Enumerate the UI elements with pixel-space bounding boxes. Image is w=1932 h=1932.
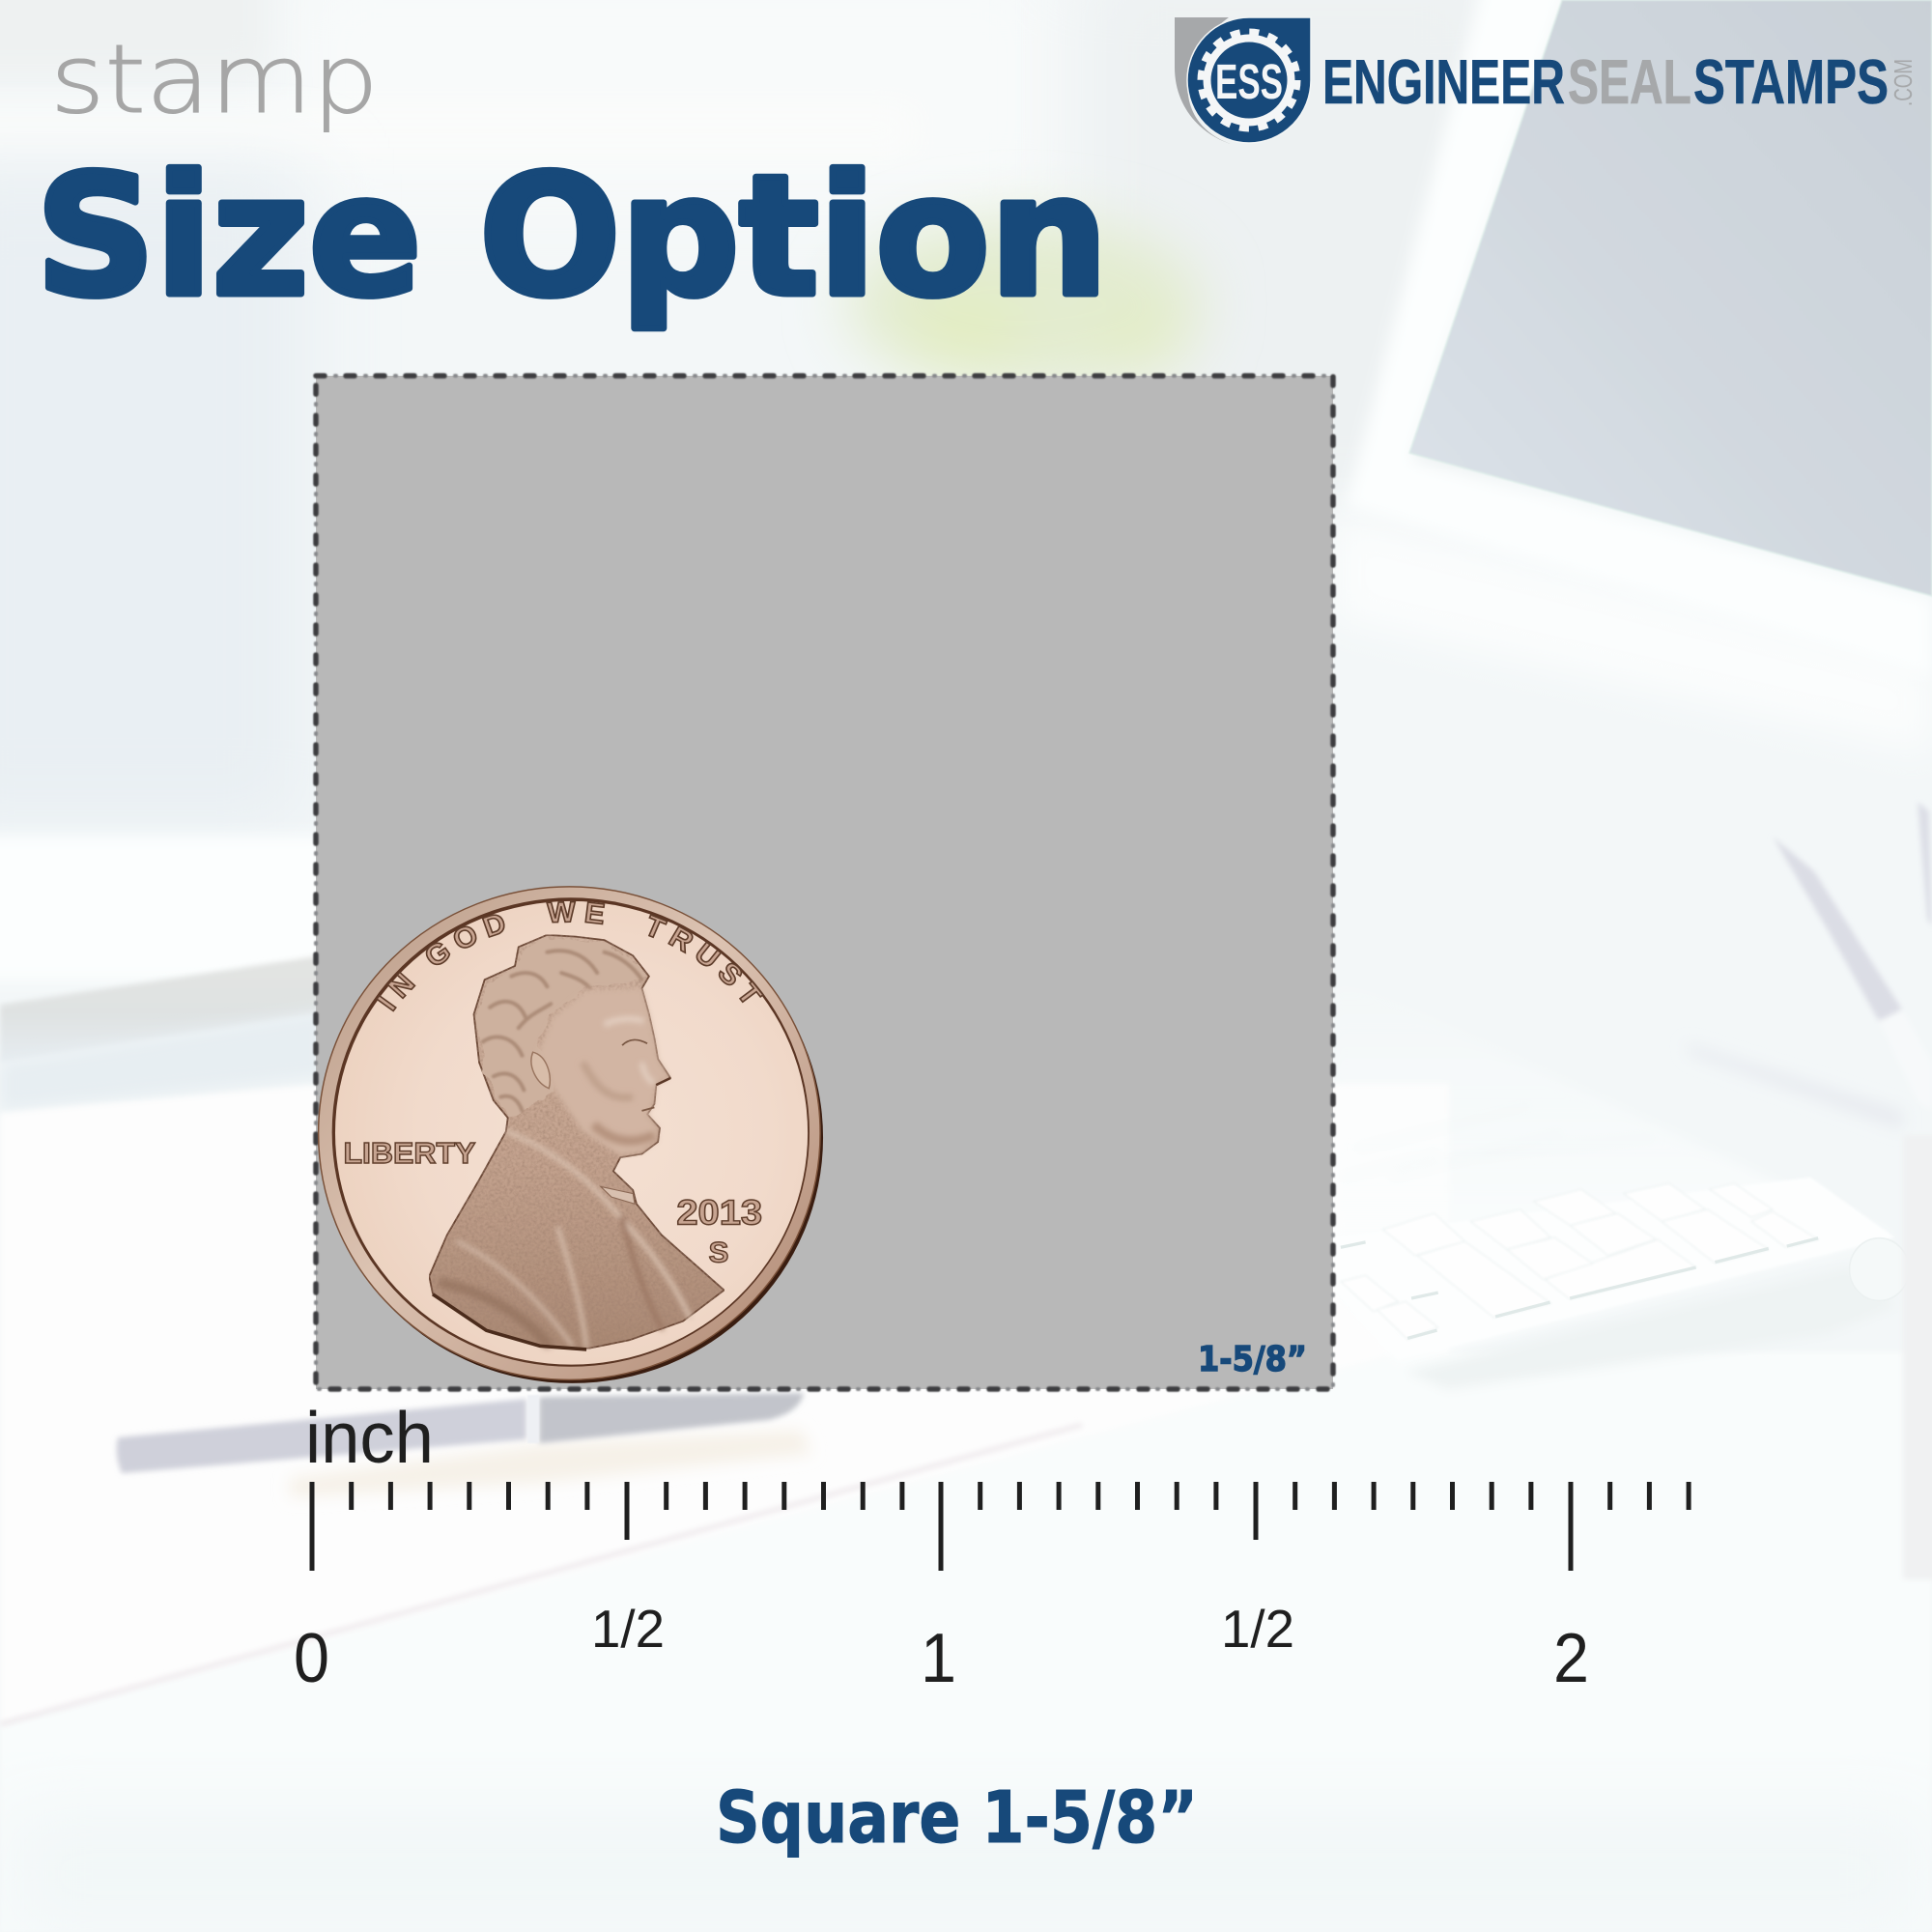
hair — [477, 938, 645, 1116]
Lincoln portrait — [429, 935, 724, 1350]
ruler — [294, 1397, 1689, 1697]
ruler ticks — [312, 1482, 1689, 1571]
face — [538, 988, 669, 1155]
coin motto: IN GOD WE TRUST — [377, 900, 763, 1012]
ruler numbers: 1 — [921, 1620, 956, 1697]
caption: Square 1-5/8: Square 1-5/8” — [716, 1776, 1198, 1860]
ruler numbers: 0 — [294, 1620, 329, 1697]
logo badge: ESS — [1215, 54, 1283, 109]
computer monitor — [1409, 0, 1932, 596]
subtitle: stamp: stamp — [50, 25, 379, 135]
pen — [117, 1393, 811, 1497]
ruler numbers — [294, 1599, 1589, 1697]
pencils — [1773, 802, 1932, 1111]
coin date: 2013 S — [676, 1193, 762, 1268]
ruler numbers: 1/2 — [1221, 1599, 1294, 1659]
keyboard — [1333, 973, 1909, 1389]
wordmark: SEAL — [1568, 46, 1691, 117]
wordmark: ENGINEER — [1322, 46, 1565, 117]
stamp area: gray square with dashed border — [316, 376, 1333, 1389]
ear — [531, 1052, 550, 1089]
wordmark: .COM — [1889, 59, 1918, 106]
title: Size Option: Size Option — [36, 139, 1108, 333]
cup — [1903, 1135, 1932, 1579]
coin date: 2013 S: S — [709, 1236, 728, 1268]
penny coin for scale — [317, 886, 823, 1383]
logo: Engineer Seal Stamps — [1175, 17, 1918, 144]
plant — [845, 217, 1203, 391]
coat — [443, 1131, 690, 1347]
ruler unit label: inch — [305, 1397, 434, 1478]
ruler numbers: 1/2 — [591, 1599, 665, 1659]
ruler numbers: 2 — [1553, 1620, 1589, 1697]
coin inscription: LIBERTY: LIBERTY — [344, 1137, 476, 1170]
size label inside square: 1-5/8” — [1198, 1340, 1307, 1379]
coin date: 2013 S: 2013 — [676, 1193, 762, 1233]
wordmark — [1322, 46, 1918, 117]
logo badge — [1175, 17, 1311, 144]
